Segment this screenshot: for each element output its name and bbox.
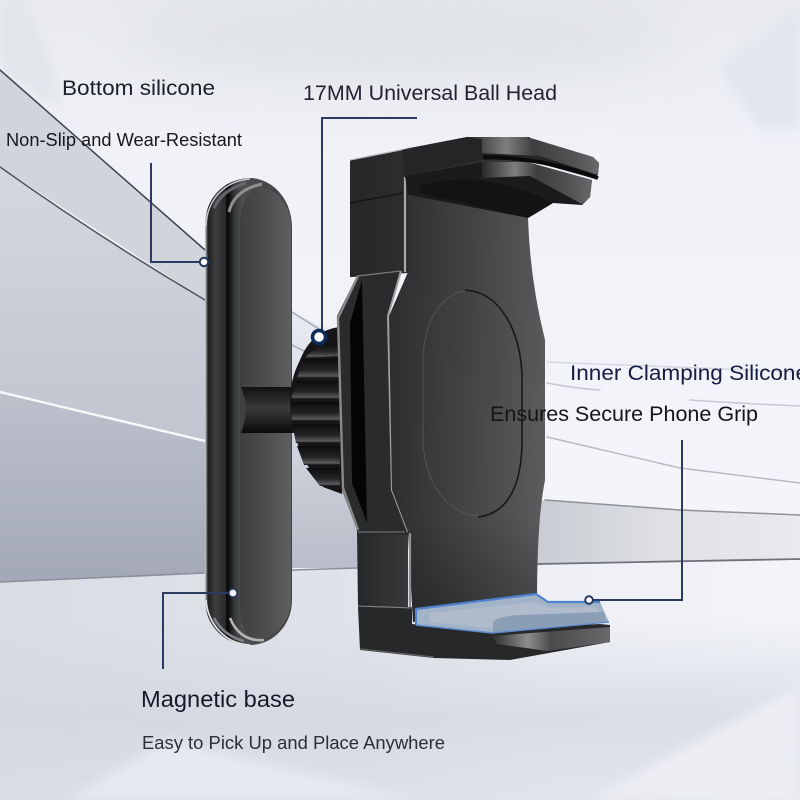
clamp back block (350, 137, 530, 607)
callout leader: inner silicone (585, 440, 682, 604)
clamp front body (389, 177, 545, 622)
label: pick up note: Easy to Pick Up and Place Anywhere (142, 733, 445, 753)
knurled ball head (290, 327, 342, 494)
ball head stem (241, 387, 296, 433)
bottom clamp arm (358, 606, 610, 660)
hinge (337, 270, 413, 535)
label: ball head: 17MM Universal Ball Head (303, 81, 557, 105)
label: non-slip note: Non-Slip and Wear-Resistant (6, 130, 242, 150)
plate face (240, 188, 291, 640)
label: inner clamping silicone: Inner Clamping Silicone (570, 362, 800, 385)
callout leader: bottom silicone (151, 163, 208, 266)
label: bottom silicone: Bottom silicone (62, 76, 215, 100)
oval recess on clamp (423, 290, 522, 517)
inner clamping silicone (blue) (416, 594, 609, 633)
callout leader: ball head (312, 118, 417, 344)
top clamp arm (402, 137, 599, 218)
label: magnetic base: Magnetic base (141, 686, 295, 712)
label: secure grip note: Ensures Secure Phone Grip (490, 403, 758, 426)
callout leader: magnetic base (163, 589, 237, 669)
background streak lines (0, 70, 800, 582)
magnetic base plate (205, 178, 292, 645)
